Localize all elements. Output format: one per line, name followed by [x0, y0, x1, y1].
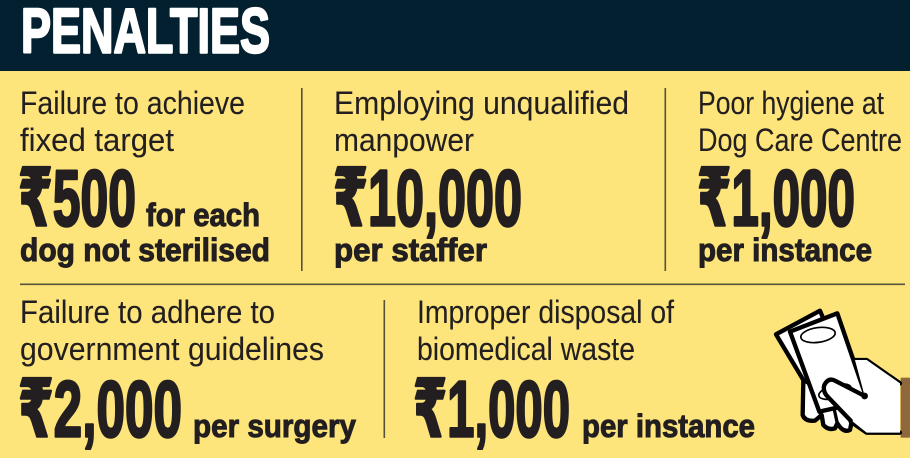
- panel: failure to achieve fixed target: ₹500: [18, 154, 136, 242]
- header band: [0, 0, 910, 71]
- panel: failure to adhere to government guidelines: government guidelines: [20, 331, 324, 367]
- panel: employing unqualified manpower: [333, 85, 629, 268]
- panel: failure to adhere to government guidelines: Failure to adhere to: [20, 294, 275, 330]
- panel: failure to achieve fixed target: fixed target: [20, 122, 174, 158]
- icon: hand holding banknotes: [776, 311, 910, 438]
- panel: failure to achieve fixed target: dog not sterilised: [20, 232, 270, 268]
- panel: improper disposal of biomedical waste: ₹1,000: [413, 364, 570, 454]
- panel: employing unqualified manpower: per staffer: [334, 232, 487, 268]
- panel: improper disposal of biomedical waste: Improper disposal of: [417, 294, 674, 330]
- panel: improper disposal of biomedical waste: biomedical waste: [417, 331, 635, 367]
- panel: failure to adhere to government guidelines: [18, 294, 356, 454]
- panel: employing unqualified manpower: manpower: [334, 122, 474, 158]
- panel: poor hygiene at dog care centre: [697, 85, 902, 268]
- panel: improper disposal of biomedical waste: per instance: [582, 408, 755, 444]
- panel: failure to achieve fixed target: for each: [146, 197, 260, 233]
- panel: failure to adhere to government guidelines: per surgery: [193, 408, 356, 444]
- panel: failure to achieve fixed target: Failure to achieve: [20, 85, 245, 121]
- panel: employing unqualified manpower: Employing unqualified: [334, 85, 629, 121]
- panel: employing unqualified manpower: ₹10,000: [333, 154, 522, 242]
- panel: improper disposal of biomedical waste: [413, 294, 755, 454]
- panel: failure to achieve fixed target: [18, 85, 270, 268]
- panel: poor hygiene at dog care centre: per instance: [698, 232, 872, 268]
- panel: failure to adhere to government guidelines: ₹2,000: [18, 364, 182, 454]
